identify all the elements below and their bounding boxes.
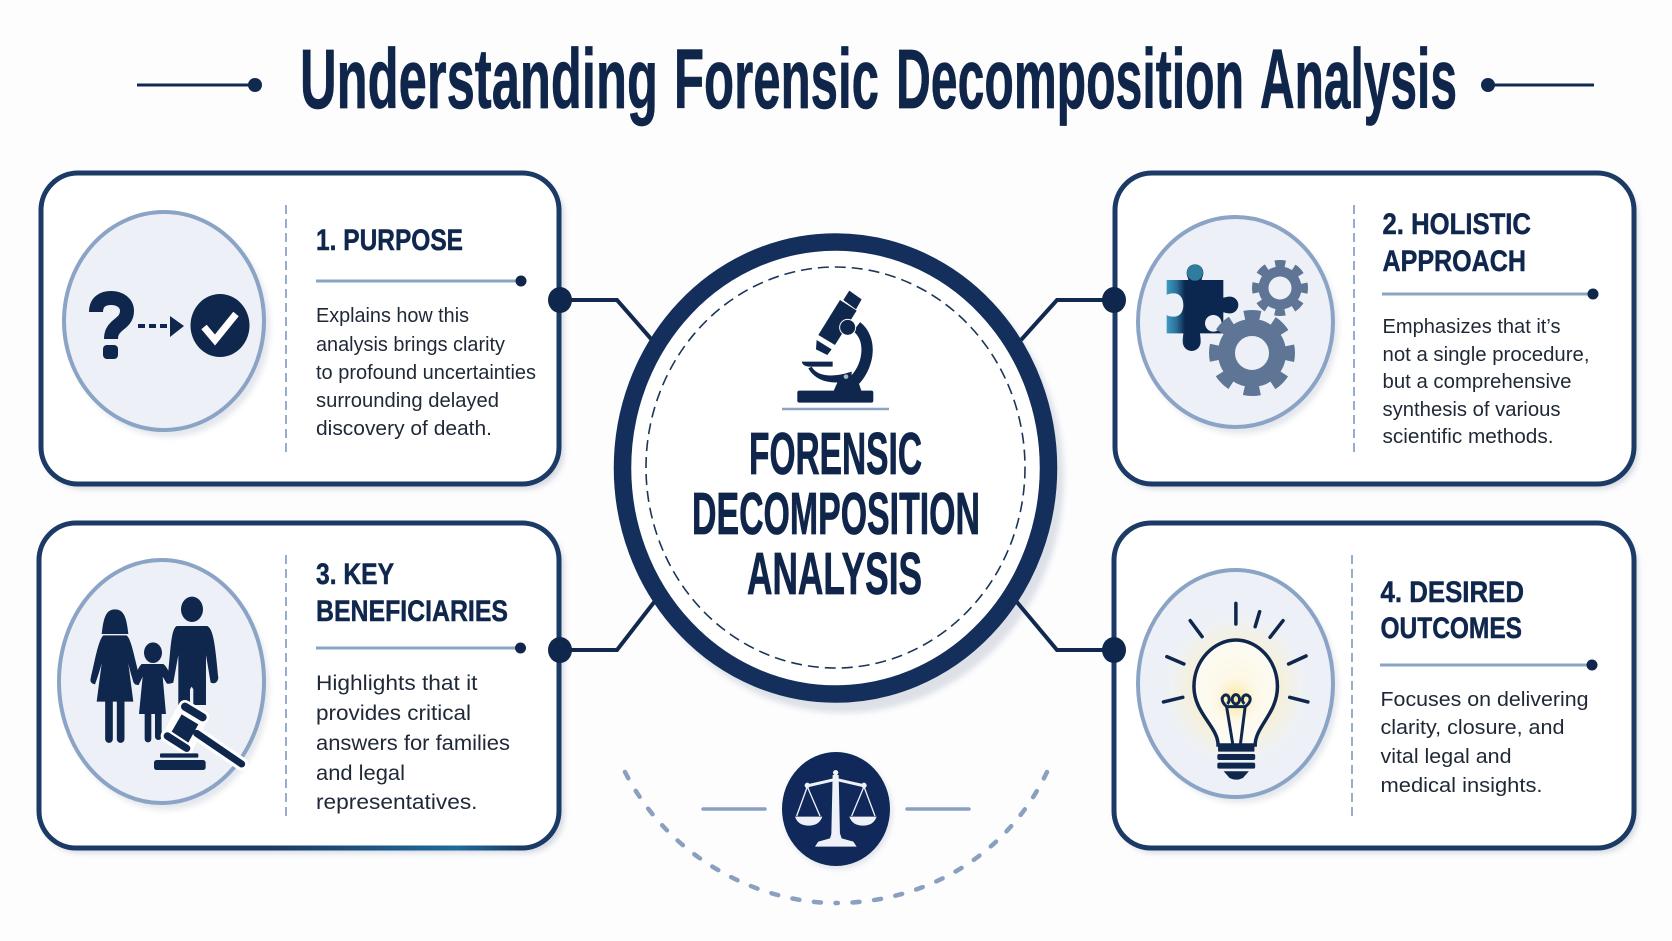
text: outcomes description: vital legal and xyxy=(1380,746,1512,768)
central heading xyxy=(692,421,980,607)
text: beneficiaries description: answers for families xyxy=(316,732,510,755)
connector nodes xyxy=(548,287,1126,663)
text: purpose description: to profound uncertainties xyxy=(316,362,536,384)
text: holistic description: but a comprehensive xyxy=(1382,371,1572,393)
text: beneficiaries description: and legal xyxy=(316,762,405,785)
connector lines xyxy=(560,300,1114,650)
icon: scales of justice xyxy=(703,752,969,869)
text: beneficiaries description xyxy=(316,672,510,814)
title: Forensic xyxy=(674,32,879,126)
heading: holistic approach: APPROACH xyxy=(1382,245,1526,278)
text: outcomes description: clarity, closure, and xyxy=(1380,717,1564,739)
icon: microscope xyxy=(797,291,873,403)
text: purpose description: surrounding delayed xyxy=(316,390,499,412)
text: holistic description: scientific methods. xyxy=(1382,426,1554,448)
heading rule xyxy=(1382,288,1598,300)
central circle xyxy=(622,242,1048,694)
heading: holistic approach: 2. HOLISTIC xyxy=(1382,208,1531,241)
heading: desired outcomes: 4. DESIRED xyxy=(1380,576,1524,609)
text: beneficiaries description: representatives. xyxy=(316,791,478,814)
text: holistic description xyxy=(1382,316,1590,448)
text: beneficiaries description: Highlights that it xyxy=(316,672,478,695)
heading: desired outcomes xyxy=(1380,576,1524,645)
central heading: DECOMPOSITION xyxy=(692,481,980,547)
icon: family and gavel xyxy=(59,560,269,810)
text: purpose description: analysis brings clarity xyxy=(316,334,505,356)
text: holistic description: Emphasizes that it’s xyxy=(1382,316,1560,338)
heading: purpose: 1. PURPOSE xyxy=(316,224,463,257)
icon: puzzle and gears xyxy=(1138,217,1338,434)
title: Understanding xyxy=(300,32,658,126)
text: beneficiaries description: provides critical xyxy=(316,702,471,725)
heading: key beneficiaries: 3. KEY xyxy=(316,558,394,591)
microscope underline xyxy=(782,408,889,410)
icon: light bulb xyxy=(1138,570,1338,803)
text: purpose description: discovery of death. xyxy=(316,418,492,440)
central circle shadow xyxy=(624,243,1064,713)
heading: desired outcomes: OUTCOMES xyxy=(1380,612,1522,645)
text: purpose description xyxy=(316,305,536,440)
icon: question to check xyxy=(64,212,270,437)
text: holistic description: not a single procedure, xyxy=(1382,344,1590,366)
heading: key beneficiaries: BENEFICIARIES xyxy=(316,595,508,628)
heading rule xyxy=(316,276,526,286)
panel: 2. holistic approach xyxy=(1115,173,1638,489)
text: outcomes description: medical insights. xyxy=(1380,775,1542,797)
text: outcomes description: Focuses on delivering xyxy=(1380,689,1588,711)
title: Decomposition xyxy=(896,32,1244,126)
heading rule xyxy=(316,642,526,654)
title xyxy=(137,32,1594,126)
text: holistic description: synthesis of various xyxy=(1382,399,1560,421)
central heading: FORENSIC xyxy=(749,421,922,487)
text: outcomes description xyxy=(1380,689,1588,797)
heading rule xyxy=(1380,660,1598,670)
heading: key beneficiaries xyxy=(316,558,508,628)
central heading: ANALYSIS xyxy=(747,541,922,607)
text: purpose description: Explains how this xyxy=(316,305,469,327)
dashed arc xyxy=(625,772,1047,903)
title: Analysis xyxy=(1260,32,1457,126)
panel: 4. desired outcomes xyxy=(1114,523,1638,853)
panel: 1. purpose xyxy=(41,173,564,489)
panel: 3. key beneficiaries xyxy=(39,523,564,853)
heading: holistic approach xyxy=(1382,208,1531,278)
